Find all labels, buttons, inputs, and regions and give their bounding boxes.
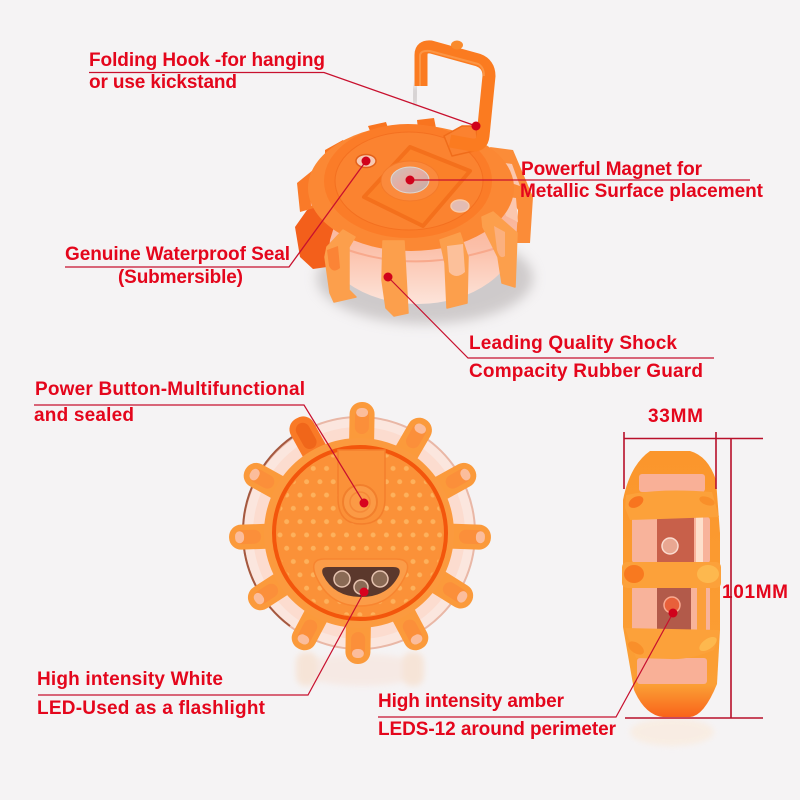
- flashlight raised rim: [314, 559, 408, 606]
- callout: white LED: High intensity White: [37, 669, 223, 690]
- callout: shock guard: Leading Quality Shock: [469, 333, 677, 354]
- folding hook: [421, 47, 489, 145]
- dotted texture: [277, 450, 443, 616]
- dimension: height 101MM: [624, 438, 788, 718]
- right panes: [498, 162, 520, 222]
- callout: shock guard: [384, 272, 714, 382]
- callout: amber LEDs: LEDS-12 around perimeter: [378, 719, 617, 740]
- flashlight window: [322, 567, 400, 597]
- dark lens edge: [243, 432, 300, 626]
- guard bands: [622, 491, 721, 659]
- outer rim: [264, 438, 454, 628]
- clear lens housing: [318, 160, 518, 304]
- clear lens ring: [243, 417, 475, 649]
- callout: waterproof seal: [65, 156, 370, 288]
- amber LED upper: [662, 538, 678, 554]
- callout: waterproof seal: Genuine Waterproof Seal: [65, 244, 290, 265]
- lens window upper: [632, 517, 710, 563]
- upper left dark spoke: [285, 412, 335, 474]
- amber LED lower: [664, 597, 680, 613]
- dimension: height 101MM: 101MM: [722, 582, 788, 603]
- hook hinge: [444, 126, 478, 156]
- callout: magnet: [406, 159, 764, 202]
- dimension: width 33MM: 33MM: [648, 406, 703, 427]
- callout: folding hook: Folding Hook -for hanging: [89, 50, 325, 71]
- top plate: [324, 124, 492, 238]
- callout: folding hook: [89, 50, 480, 130]
- callout: folding hook: or use kickstand: [89, 72, 237, 93]
- lower rubber guard spokes: [325, 212, 517, 316]
- lens tint: [253, 427, 465, 639]
- callout: power button: [34, 379, 368, 508]
- mirror reflection: [296, 652, 424, 686]
- hook nub: [451, 40, 463, 50]
- waterproof seal: [356, 154, 376, 168]
- dark inner ring: [274, 447, 446, 619]
- callout: white LED: [37, 588, 368, 719]
- device: underside view with power button and flashlight: [229, 402, 491, 686]
- power button tab: [338, 450, 385, 524]
- magnet disc: [391, 167, 429, 193]
- hook shadow: [414, 86, 416, 104]
- callout: magnet: Metallic Surface placement: [520, 181, 764, 202]
- lower left guard: [295, 203, 337, 269]
- reflection under side view: [630, 718, 714, 746]
- power button: [343, 485, 377, 519]
- guard slots: [327, 226, 505, 276]
- upper left guard: [325, 140, 352, 165]
- callout: waterproof seal: (Submersible): [118, 267, 243, 288]
- callout: magnet: Powerful Magnet for: [521, 159, 703, 180]
- power button inner ring: [350, 492, 370, 512]
- rear guard one: [368, 122, 389, 136]
- lens window top: [639, 474, 705, 492]
- lens band: [348, 245, 505, 261]
- twelve rubber spokes: [229, 402, 491, 664]
- device: top view with folding hook: [295, 40, 533, 324]
- callout: shock guard: Compacity Rubber Guard: [469, 361, 703, 382]
- rear guard two: [417, 118, 436, 129]
- callout: amber LEDs: [378, 608, 678, 740]
- callout: power button: and sealed: [34, 405, 134, 426]
- callout: white LED: LED-Used as a flashlight: [37, 698, 266, 719]
- white LEDs: [334, 571, 388, 594]
- lens window lower: [632, 586, 710, 632]
- left guard pane: [310, 186, 323, 206]
- left guard: [297, 170, 328, 212]
- rear and side rubber guards: [295, 118, 533, 269]
- side body: [623, 451, 720, 717]
- plate ring: [335, 132, 483, 230]
- hook highlight: [420, 51, 484, 86]
- band slots: [624, 494, 719, 657]
- dimension: width 33MM: [624, 406, 716, 489]
- screw: [451, 200, 469, 212]
- magnet seat: [381, 161, 439, 201]
- callout: amber LEDs: High intensity amber: [378, 691, 565, 712]
- ground shadow: [317, 232, 533, 324]
- main disc edge: [308, 125, 514, 251]
- raised magnet mount: [364, 147, 470, 226]
- lens window bottom: [637, 658, 707, 684]
- callout: power button: Power Button-Multifunctional: [35, 379, 305, 400]
- device: side profile: [622, 451, 721, 746]
- right guard: [490, 147, 533, 243]
